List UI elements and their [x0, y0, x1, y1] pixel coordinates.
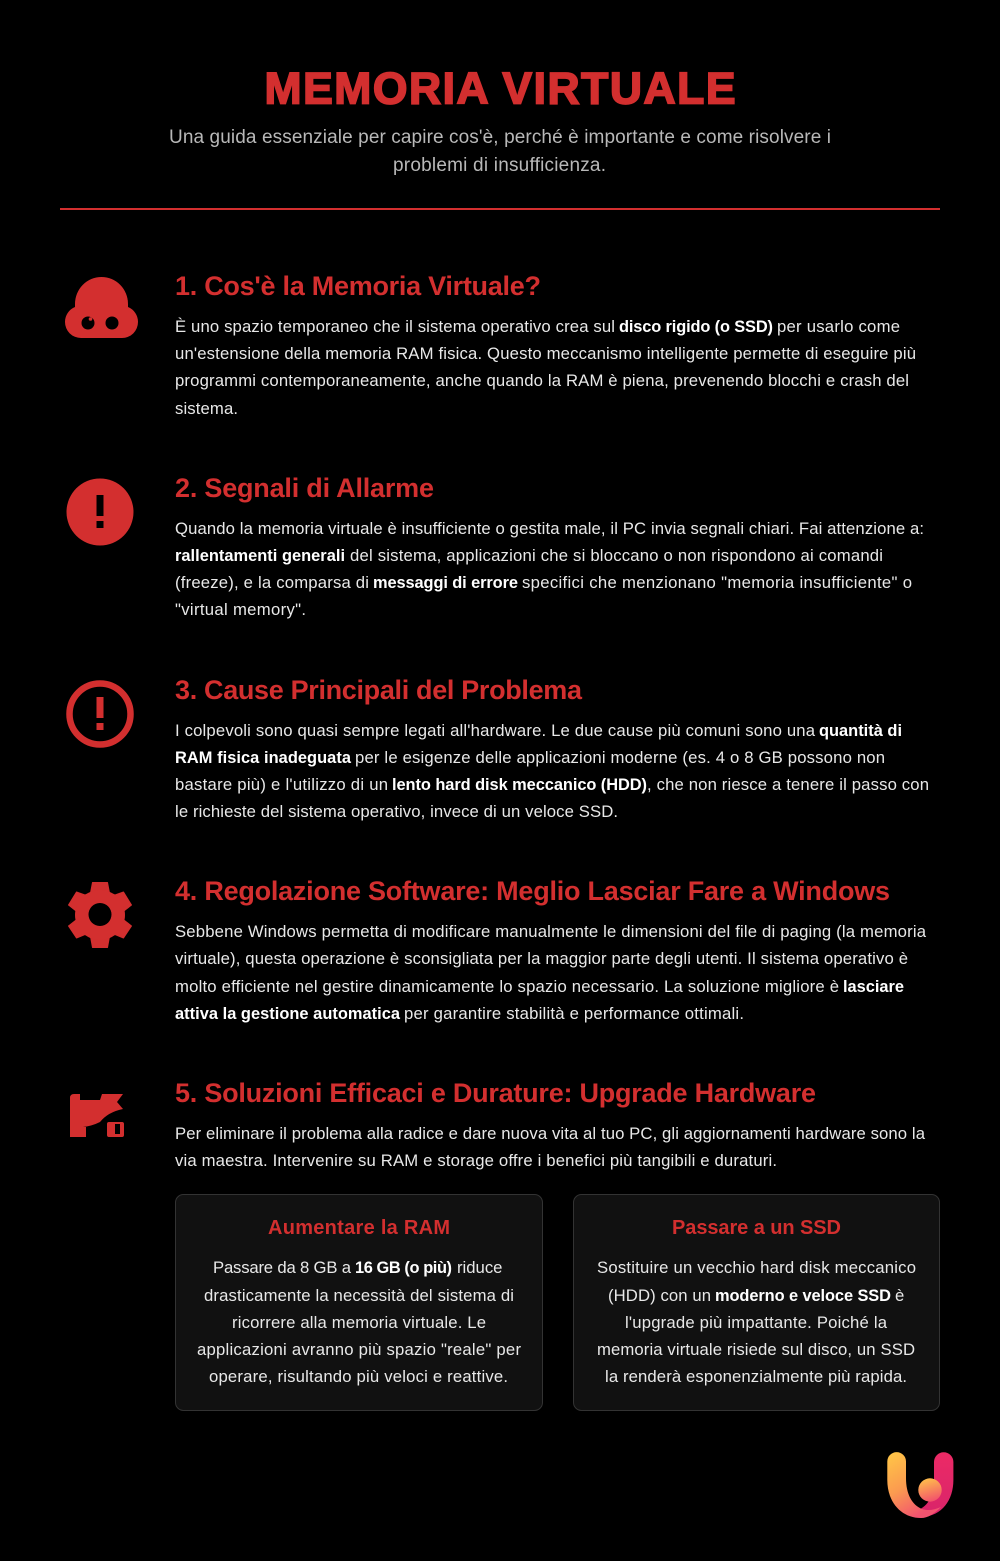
section 5 [70, 1078, 940, 1410]
text block 4: molto efficiente nel gestire dinamicamente lo spazio necessario. La soluzione migliore è [175, 977, 839, 996]
card text: SSD: memoria virtuale risiede sul disco, un SSD [597, 1340, 915, 1359]
text block 3: , che non riesce a tenere il passo con [647, 775, 929, 794]
icon: hardware upgrade [70, 1094, 124, 1137]
card text: RAM [197, 1258, 521, 1386]
heading 3: 3. Cause Principali del Problema [175, 675, 583, 705]
text block 1: programmi contemporaneamente, anche quando la RAM è piena, prevenendo blocchi e crash del [175, 371, 909, 390]
text block 3: per le esigenze delle applicazioni moderne (es. 4 o 8 GB possono non [355, 748, 885, 767]
heading 4: 4. Regolazione Software: Meglio Lasciar Fare a Windows [175, 876, 890, 906]
icon: filled alert circle [66, 478, 134, 546]
text block 1: disco rigido (o SSD) [619, 318, 773, 336]
card text: RAM: Passare da 8 GB a [213, 1258, 352, 1277]
card text: RAM: operare, risultando più veloci e reattive. [209, 1367, 508, 1386]
section 3 [70, 675, 929, 821]
text block 5 [175, 1124, 926, 1170]
text block 4: virtuale), questa operazione è sconsigliata per la maggior parte degli utenti. Il sistema operativo è [175, 949, 908, 968]
text block 3: quantità di [819, 722, 902, 740]
text block 1: per usarlo come [777, 317, 900, 336]
card text: RAM: 16 GB (o più) [355, 1259, 452, 1277]
text block 1: un'estensione della memoria RAM fisica. Questo meccanismo intelligente permette di eseguire più [175, 344, 916, 363]
text block 4 [175, 922, 927, 1023]
logo [887, 1452, 953, 1518]
header [169, 64, 831, 176]
text block 3: I colpevoli sono quasi sempre legati all'hardware. Le due cause più comuni sono una [175, 721, 816, 740]
heading 2: 2. Segnali di Allarme [175, 473, 434, 503]
card text: SSD: l'upgrade più impattante. Poiché la [625, 1313, 888, 1332]
text block 2: rallentamenti generali [175, 547, 345, 565]
text block 4: per garantire stabilità e performance ottimali. [404, 1004, 744, 1023]
panel: aumentare la RAM [176, 1194, 542, 1410]
card text: SSD: (HDD) con un [608, 1286, 711, 1305]
text block 2 [175, 519, 924, 619]
text block 3: RAM fisica inadeguata [175, 749, 352, 767]
text block 3: bastare più) e l'utilizzo di un [175, 775, 388, 794]
section 2 [66, 473, 924, 619]
text block 2: "virtual memory". [175, 600, 306, 619]
text block 2: del sistema, applicazioni che si bloccano o non rispondono ai comandi [350, 546, 883, 565]
card text: RAM: ricorrere alla memoria virtuale. Le [232, 1313, 486, 1332]
text block 3: lento hard disk meccanico (HDD) [392, 776, 647, 794]
icon: outlined alert circle [70, 684, 130, 744]
text block 3: le richieste del sistema operativo, invece di un veloce SSD. [175, 802, 618, 821]
card text: SSD: la renderà esponenzialmente più rapida. [605, 1367, 907, 1386]
subtitle: problemi di insufficienza. [393, 155, 606, 176]
text block 4: attiva la gestione automatica [175, 1005, 401, 1023]
text block 4: lasciare [843, 978, 904, 996]
text block 2: Quando la memoria virtuale è insufficiente o gestita male, il PC invia segnali chiari. Fai attenzione a: [175, 519, 924, 538]
section 1 [65, 271, 916, 418]
text block 3 [175, 721, 929, 821]
title: MEMORIA VIRTUALE [264, 64, 736, 114]
heading 5: 5. Soluzioni Efficaci e Durature: Upgrade Hardware [175, 1078, 816, 1108]
text block 2: messaggi di errore [373, 574, 518, 592]
card text: RAM: drasticamente la necessità del sistema di [204, 1286, 514, 1305]
card text: SSD [597, 1258, 916, 1386]
text block 1: sistema. [175, 399, 238, 418]
header divider [60, 208, 940, 210]
text block 1: È uno spazio temporaneo che il sistema operativo crea sul [175, 317, 615, 336]
card text: RAM: applicazioni avranno più spazio "reale" per [197, 1340, 521, 1359]
card text: SSD: Sostituire un vecchio hard disk meccanico [597, 1258, 916, 1277]
icon: gear [68, 882, 132, 948]
card text: RAM: riduce [457, 1258, 502, 1277]
heading 1: 1. Cos'è la Memoria Virtuale? [175, 271, 541, 301]
text block 5: Per eliminare il problema alla radice e dare nuova vita al tuo PC, gli aggiornamenti hardware sono la [175, 1124, 926, 1143]
text block 4: Sebbene Windows permetta di modificare manualmente le dimensioni del file di paging (la memoria [175, 922, 927, 941]
card heading: RAM: Aumentare la RAM [268, 1217, 450, 1239]
card text: SSD: moderno e veloce SSD [715, 1287, 891, 1305]
section 4 [68, 876, 927, 1023]
card text: SSD: è [895, 1286, 904, 1305]
subtitle: Una guida essenziale per capire cos'è, perché è importante e come risolvere i [169, 127, 831, 148]
subtitle [169, 127, 831, 176]
panel: passare a un SSD [574, 1194, 940, 1410]
icon: cloud with two holes [65, 277, 138, 338]
text block 5: via maestra. Intervenire su RAM e storage offre i benefici più tangibili e duraturi. [175, 1151, 777, 1170]
text block 2: specifici che menzionano "memoria insufficiente" o [522, 573, 912, 592]
text block 1 [175, 317, 916, 418]
card heading: SSD: Passare a un SSD [672, 1217, 841, 1239]
text block 2: (freeze), e la comparsa di [175, 573, 369, 592]
